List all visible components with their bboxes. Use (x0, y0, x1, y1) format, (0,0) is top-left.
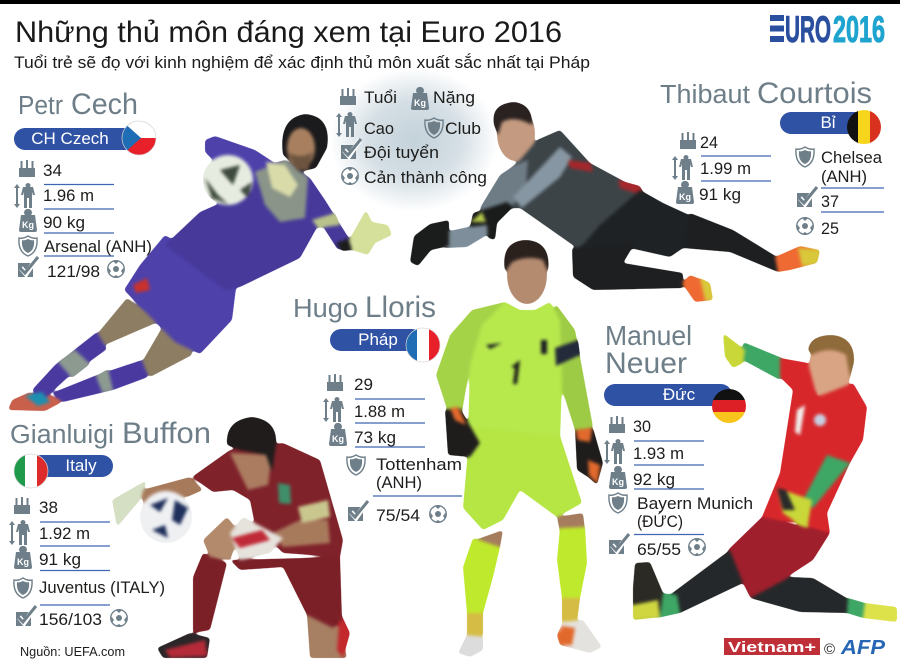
legend icons (336, 87, 443, 184)
country pill (30, 455, 113, 477)
stats: (ĐỨC) (637, 512, 683, 531)
name: Courtois (757, 77, 872, 110)
stats: 65/55 (637, 540, 681, 559)
stats: 156/103 (39, 610, 102, 629)
player photo: Manuel Neuer (633, 333, 897, 622)
country pill (330, 329, 423, 351)
stats (604, 416, 753, 559)
name: Buffon (122, 417, 211, 450)
player photo: Petr Cech (8, 114, 392, 411)
country pill: Đức (663, 385, 696, 404)
flag: France (406, 328, 441, 362)
legend labels: Cản thành công (364, 168, 487, 187)
country pill (780, 112, 866, 134)
logo: Vietnam+: Vietnam+ (728, 639, 816, 656)
country pill (604, 384, 732, 406)
legend labels: Tuổi (364, 88, 397, 107)
name (293, 291, 436, 324)
stats: 29 (354, 375, 373, 394)
flag: Italy (14, 454, 49, 488)
name (605, 320, 692, 380)
stats: 34 (43, 161, 62, 180)
stats: 38 (39, 498, 58, 517)
name (10, 417, 211, 450)
legend panel with soft glow (330, 68, 498, 212)
flag: Germany (712, 389, 746, 424)
stats: (ANH) (821, 167, 867, 186)
stats: Chelsea (821, 148, 883, 167)
stats: 1.88 m (354, 402, 405, 421)
legend labels (364, 88, 487, 187)
name (660, 77, 872, 110)
logo: Euro 2016: URO (785, 9, 831, 50)
name: Lloris (365, 291, 436, 324)
country pill: Italy (65, 456, 97, 475)
name (18, 88, 138, 121)
stats: (ANH) (376, 473, 422, 492)
stats: 1.96 m (43, 186, 94, 205)
flag: Belgium (847, 110, 882, 144)
stats (323, 374, 462, 525)
legend labels: Nặng (433, 88, 475, 107)
name: Thibaut (660, 81, 750, 109)
country pill: Pháp (358, 330, 398, 349)
legend labels: Đội tuyển (364, 143, 439, 162)
stats: 90 kg (43, 213, 85, 232)
stats (672, 132, 884, 238)
stats (14, 160, 152, 281)
stats: Bayern Munich (637, 494, 753, 513)
player photo: Hugo Lloris (436, 240, 603, 657)
stats: 24 (700, 133, 718, 152)
player card: Thibaut Courtois (660, 77, 884, 238)
stats: 75/54 (376, 506, 420, 525)
logo: Vietnam+ (724, 638, 820, 656)
stats: 1.99 m (700, 159, 751, 178)
player card: Gianluigi Buffon (9, 417, 211, 629)
player photo: Gianluigi Buffon (112, 417, 350, 658)
stats (9, 497, 165, 629)
stats: Tottenham (376, 455, 462, 474)
country pill (14, 128, 139, 150)
stats: 92 kg (633, 470, 675, 489)
stats: Arsenal (ANH) (44, 237, 152, 256)
player card: Hugo Lloris (293, 291, 462, 525)
name: Manuel (605, 320, 692, 351)
title: Những thủ môn đáng xem tại Euro 2016 (15, 16, 562, 49)
country pill: CH Czech (31, 129, 109, 148)
stats: 91 kg (699, 185, 741, 204)
stats: 121/98 (47, 262, 100, 281)
legend labels: Cao (364, 119, 394, 138)
flag: Czech Republic (122, 121, 156, 155)
stats: 25 (821, 219, 839, 238)
stats: 1.93 m (633, 444, 684, 463)
stats: 37 (821, 192, 839, 211)
name: Hugo (293, 295, 358, 323)
logo: AFP: AFP (840, 637, 886, 659)
stats: Juventus (ITALY) (39, 578, 165, 597)
top black bar (0, 0, 900, 4)
source note: Nguồn: UEFA.com (20, 644, 125, 659)
player photo: Thibaut Courtois (410, 102, 820, 302)
player card: Manuel Neuer (604, 320, 753, 559)
stats: 91 kg (39, 550, 81, 569)
stats: 1.92 m (39, 524, 90, 543)
name: Cech (71, 88, 138, 121)
name: Gianluigi (10, 421, 114, 449)
legend labels: Club (445, 119, 481, 138)
subtitle: Tuổi trẻ sẽ đọ với kinh nghiệm để xác định thủ môn xuất sắc nhất tại Pháp (14, 53, 590, 72)
stats: 73 kg (354, 428, 396, 447)
player card: Petr Cech (14, 88, 156, 281)
name: Neuer (605, 347, 687, 380)
copyright symbol: © (824, 641, 835, 658)
name: Petr (18, 92, 63, 120)
stats: 30 (633, 417, 651, 436)
country pill: Bỉ (820, 113, 836, 132)
